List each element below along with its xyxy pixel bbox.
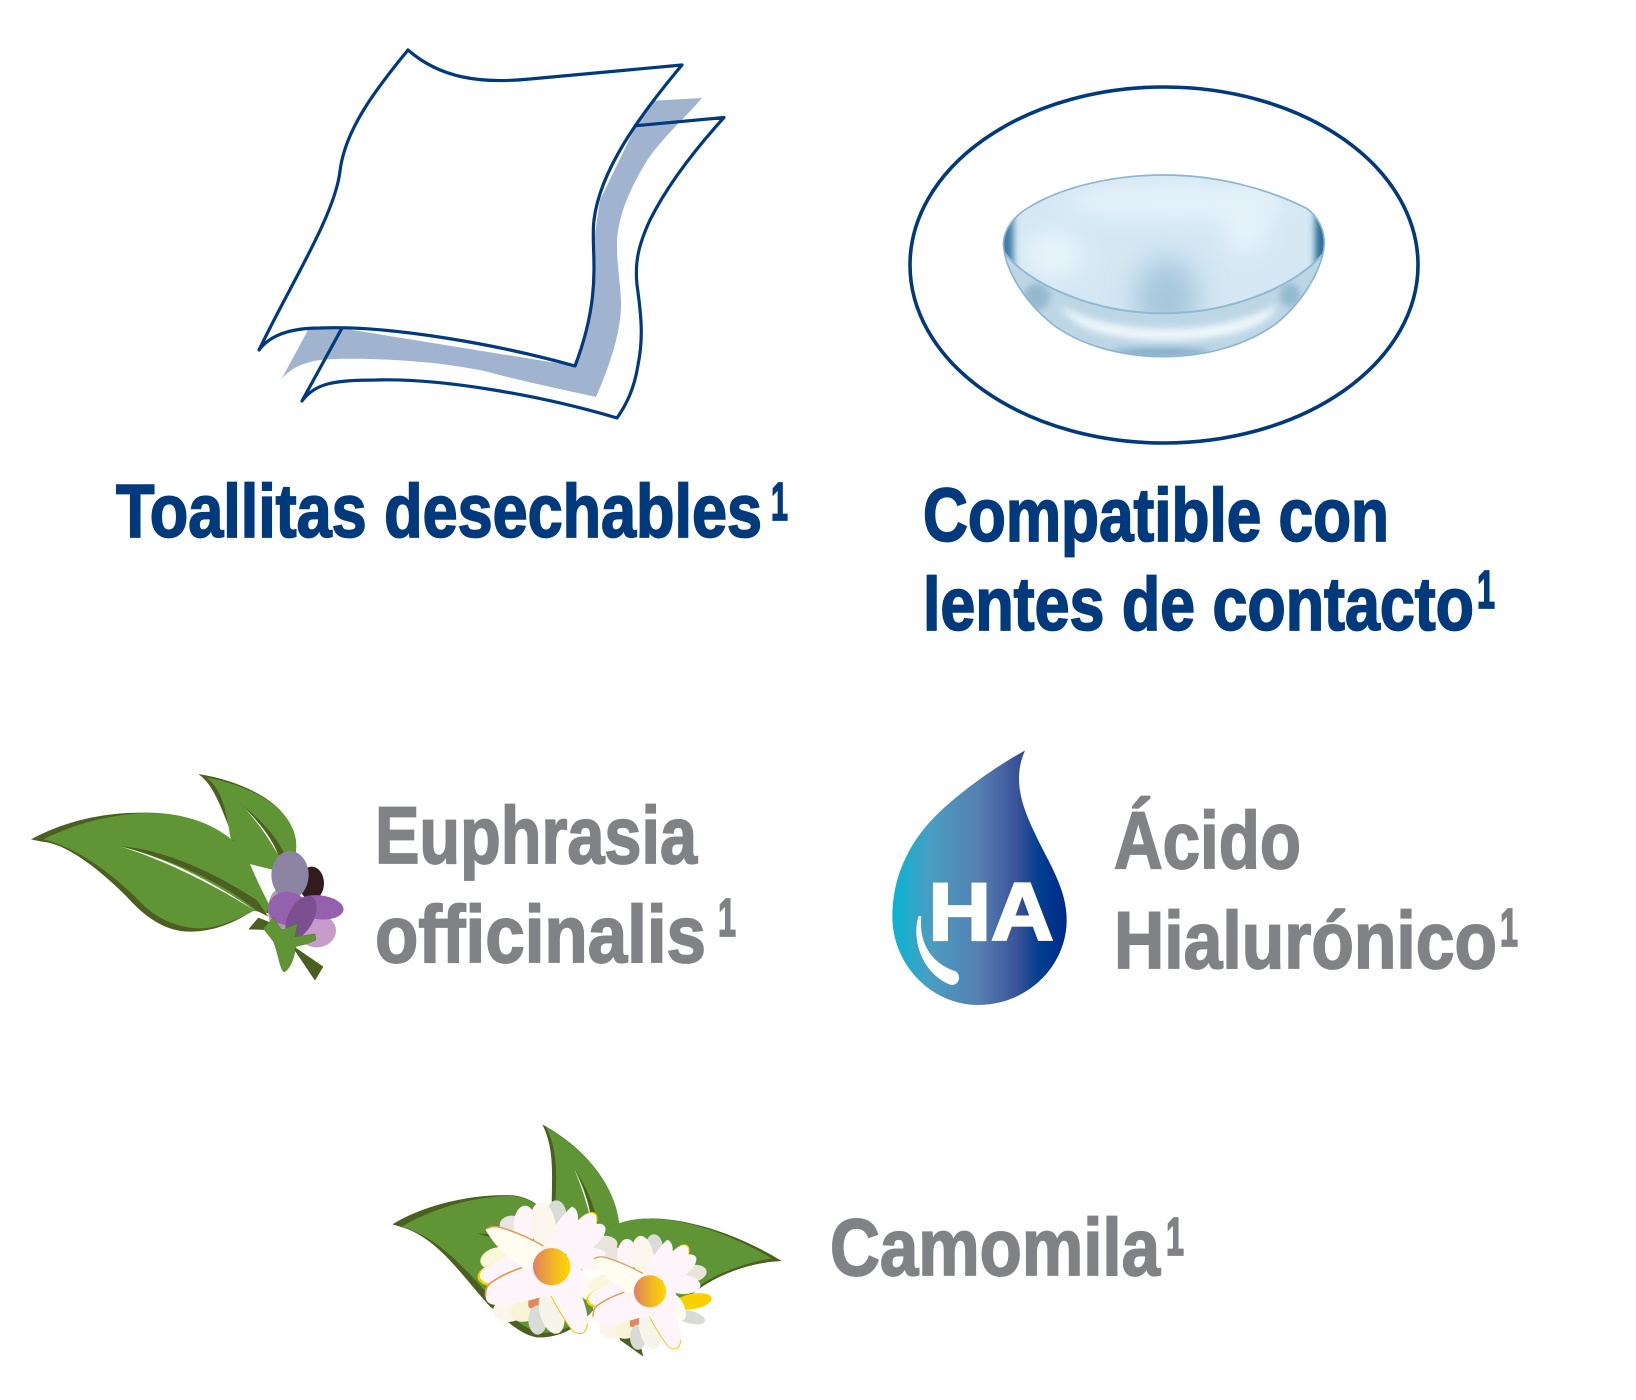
label: Ácido Hialurónico: Hialurónico: [1114, 896, 1497, 986]
flower two: [585, 1234, 713, 1352]
icon: hyaluronic acid drop: [892, 751, 1067, 1005]
sheet shadow: [281, 98, 702, 397]
label: Euphrasia officinalis: 1: [718, 888, 736, 948]
icon: chamomile: [392, 1124, 782, 1357]
heading: Compatible con lentes de contacto: [923, 473, 1495, 646]
right leaf: [600, 1218, 782, 1357]
icon: euphrasia plant: [31, 774, 345, 981]
heading: Compatible con lentes de contacto: Compatible con: [923, 473, 1389, 557]
flower one: [476, 1200, 619, 1337]
back leaf: [198, 774, 296, 869]
highlight: [916, 916, 959, 985]
label: Euphrasia officinalis: Euphrasia: [375, 791, 698, 881]
flower centre: [634, 1275, 666, 1307]
icon: disposable wipes: [259, 50, 724, 418]
HA letters: HA: [928, 867, 1054, 958]
top leaf: [542, 1124, 619, 1243]
front leaf: [31, 813, 270, 932]
heading: Toallitas desechables: Toallitas desechables: [116, 469, 762, 553]
heading: Compatible con lentes de contacto: lentes de contacto: [923, 562, 1474, 646]
front sheet: [259, 50, 682, 366]
left leaf: [392, 1195, 593, 1337]
back sheet: [302, 118, 724, 418]
label: Euphrasia officinalis: officinalis: [375, 890, 706, 980]
label: Ácido Hialurónico: 1: [1500, 898, 1518, 958]
label: Ácido Hialurónico: Ácido: [1114, 796, 1301, 886]
label: Camomila: 1: [1166, 1207, 1184, 1267]
icon: contact lens in circle: [910, 87, 1418, 443]
label: Ácido Hialurónico: [1114, 796, 1518, 986]
label: Camomila: Camomila: [830, 1203, 1161, 1293]
lens rim: [1005, 253, 1323, 313]
sepals: [263, 917, 316, 972]
stem: [248, 918, 323, 981]
label: Euphrasia officinalis: [375, 791, 736, 980]
lens: [990, 175, 1337, 358]
flower petals: [299, 867, 324, 900]
heading: Toallitas desechables: 1: [771, 472, 788, 532]
outer ring: [910, 87, 1418, 443]
heading: Compatible con lentes de contacto: 1: [1477, 560, 1495, 620]
flower centre: [533, 1248, 570, 1285]
